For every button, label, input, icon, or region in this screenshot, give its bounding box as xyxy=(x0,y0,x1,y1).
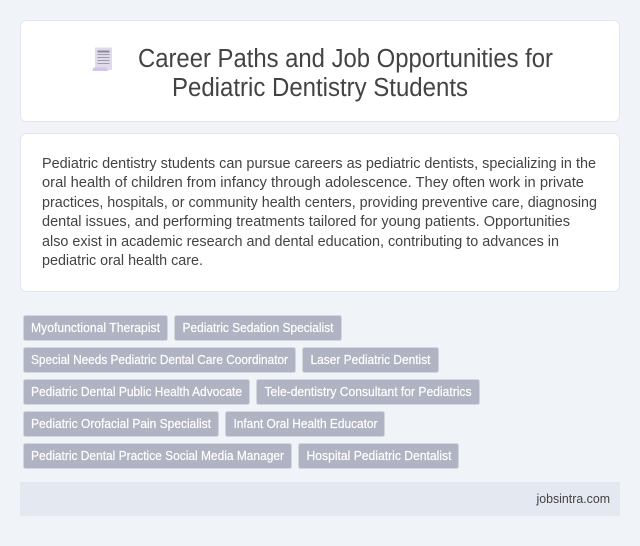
tag: Laser Pediatric Dentist: Laser Pediatric Dentist xyxy=(310,353,431,367)
tag: Tele-dentistry Consultant for Pediatrics: Tele-dentistry Consultant for Pediatrics xyxy=(264,385,472,399)
panel: description xyxy=(20,134,620,292)
tag: Infant Oral Health Educator: Infant Oral Health Educator xyxy=(234,417,378,431)
tag: Pediatric Orofacial Pain Specialist: Pediatric Orofacial Pain Specialist xyxy=(31,417,211,431)
tag: Pediatric Dental Public Health Advocate: Pediatric Dental Public Health Advocate xyxy=(31,385,242,399)
tag: Pediatric Dental Practice Social Media Manager: Pediatric Dental Practice Social Media Manager xyxy=(31,449,284,463)
panel: title card xyxy=(20,20,620,122)
tag: Hospital Pediatric Dentalist: Hospital Pediatric Dentalist xyxy=(306,449,452,463)
tag: Pediatric Dental Public Health Advocate xyxy=(24,380,250,404)
tag: Laser Pediatric Dentist xyxy=(302,348,438,372)
text block: description: Pediatric dentistry students can pursue careers as pediatric dentists, specializing in the xyxy=(42,155,596,172)
tag: Special Needs Pediatric Dental Care Coordinator xyxy=(24,348,296,372)
footer bar xyxy=(20,482,620,516)
title: Pediatric Dentistry Students xyxy=(172,74,468,102)
tag: Special Needs Pediatric Dental Care Coordinator: Special Needs Pediatric Dental Care Coordinator xyxy=(31,353,288,367)
text block: description: also exist in academic research and dental education, contributing to advances in xyxy=(42,233,559,250)
text block: description: practices, hospitals, or community health centers, providing preventive care, diagnosing xyxy=(42,194,597,211)
text block: description: pediatric oral health care. xyxy=(42,252,203,269)
tag: Myofunctional Therapist: Myofunctional Therapist xyxy=(31,321,161,335)
tag: Pediatric Sedation Specialist: Pediatric Sedation Specialist xyxy=(182,321,334,335)
text block: description: dental issues, and performing treatments tailored for young patients. Opportunities xyxy=(42,213,570,230)
footer source text: jobsintra.com xyxy=(536,492,610,506)
title: Career Paths and Job Opportunities for xyxy=(138,45,553,73)
tag: Myofunctional Therapist xyxy=(24,316,168,340)
tag: Pediatric Sedation Specialist xyxy=(174,316,342,340)
tag: Pediatric Dental Practice Social Media Manager xyxy=(24,444,292,468)
icon: document scroll xyxy=(92,48,112,71)
tag: Pediatric Orofacial Pain Specialist xyxy=(24,412,218,436)
tag list xyxy=(24,316,480,468)
text block: description xyxy=(42,155,597,269)
tag: Tele-dentistry Consultant for Pediatrics xyxy=(256,380,480,404)
tag: Hospital Pediatric Dentalist xyxy=(298,444,458,468)
text block: description: oral health of children from infancy through adolescence. They often work in private xyxy=(42,174,584,191)
tag: Infant Oral Health Educator xyxy=(226,412,384,436)
title xyxy=(138,45,553,102)
